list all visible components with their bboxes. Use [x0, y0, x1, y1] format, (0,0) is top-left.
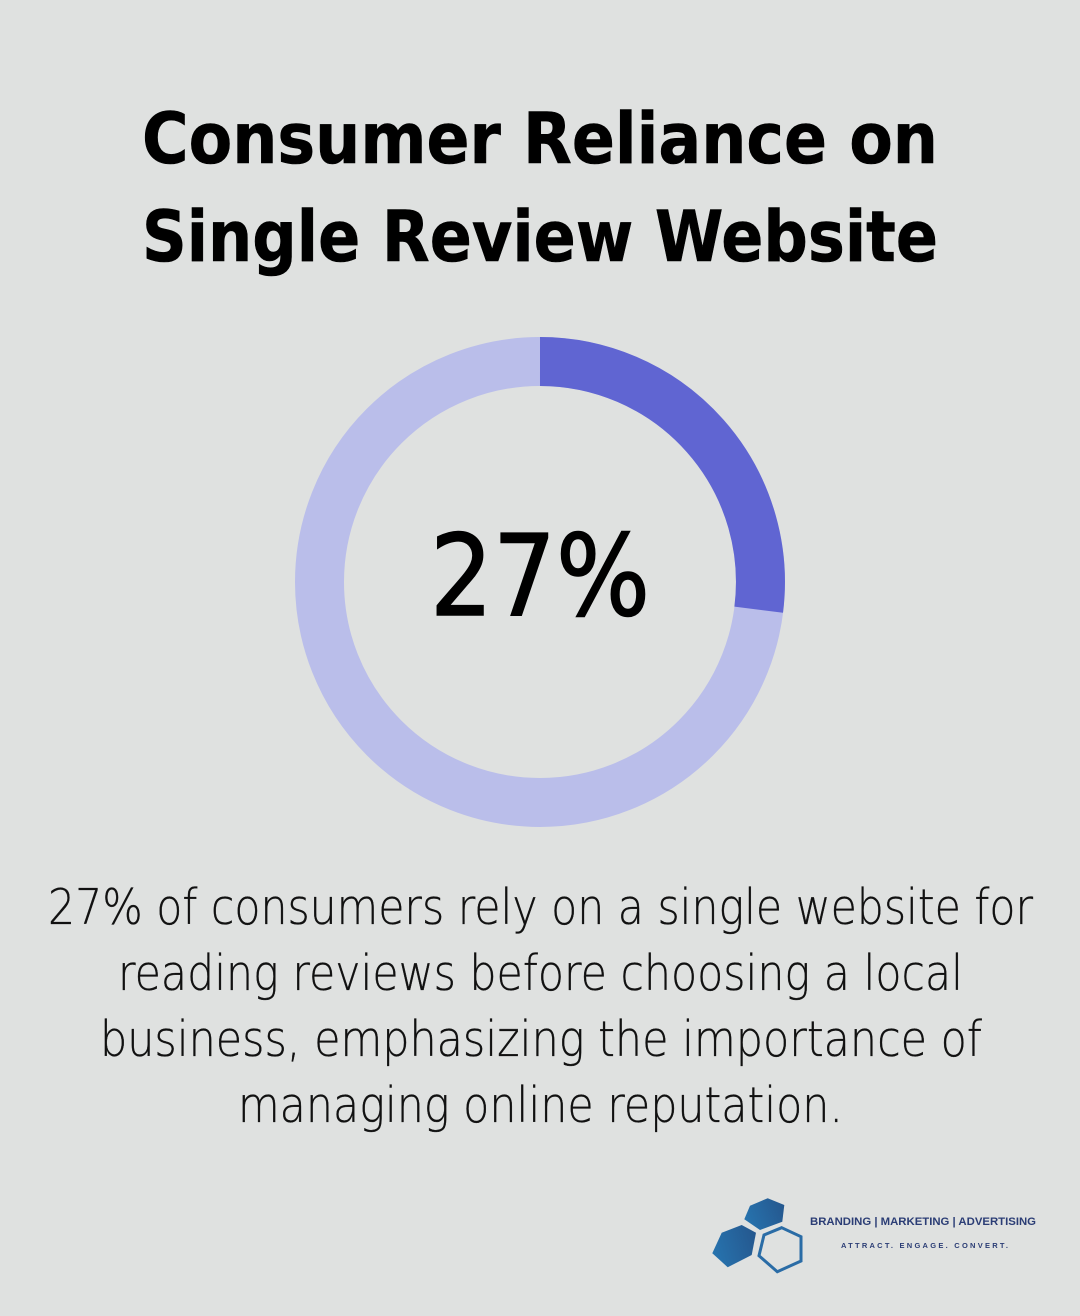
description text: reading reviews before choosing a local	[118, 945, 963, 1002]
donut track	[320, 362, 760, 802]
icon: hexagon left	[712, 1225, 756, 1267]
donut chart: 27%	[320, 362, 760, 802]
icon: hexagon top	[744, 1198, 784, 1230]
description text: business, emphasizing the importance of	[100, 1011, 983, 1068]
logo tagline top: BRANDING | MARKETING | ADVERTISING	[810, 1216, 1036, 1228]
title	[142, 98, 938, 278]
description text	[48, 879, 1034, 1134]
logo tagline bottom: ATTRACT. ENGAGE. CONVERT.	[841, 1241, 1008, 1250]
title: Single Review Website	[142, 196, 938, 278]
logo	[712, 1198, 1036, 1272]
icon: hexagon outline	[759, 1228, 801, 1272]
description text: managing online reputation.	[238, 1077, 843, 1134]
donut value label: 27%	[430, 512, 650, 642]
donut value arc	[540, 362, 760, 610]
title: Consumer Reliance on	[142, 98, 938, 180]
